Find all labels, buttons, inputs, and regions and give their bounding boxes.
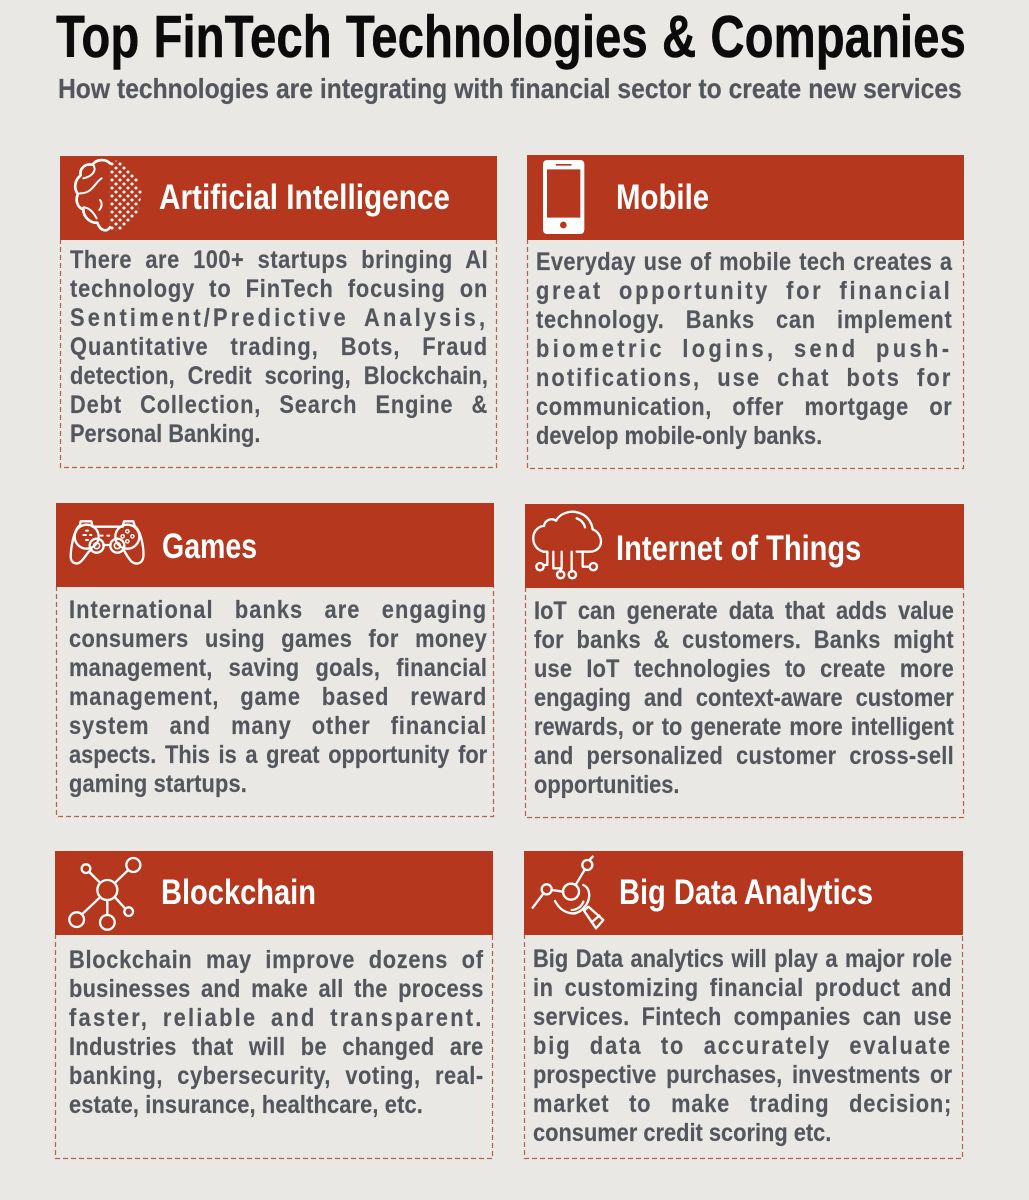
body text: aspects. This is a great opportunity for [69, 741, 487, 769]
body text: Quantitative trading, Bots, Fraud [70, 333, 488, 361]
body text: engaging and context-aware customer [534, 684, 954, 712]
heading: Artificial Intelligence [159, 178, 450, 217]
body text: in customizing financial product and [533, 974, 952, 1002]
panel: big data analytics [524, 851, 964, 1160]
icon: brain [74, 158, 142, 232]
panel: mobile [526, 155, 964, 470]
panel header [55, 851, 493, 935]
body text: estate, insurance, healthcare, etc. [69, 1091, 423, 1119]
body text: rewards, or to generate more intelligent [534, 713, 954, 741]
body text: services. Fintech companies can use [533, 1003, 952, 1031]
body text: gaming startups. [69, 770, 247, 798]
panel header [527, 155, 964, 240]
body text: biometric logins, send push- [536, 335, 952, 363]
body text: prospective purchases, investments or [533, 1061, 952, 1089]
icon: game controller [70, 520, 145, 565]
body text [536, 248, 952, 450]
panel body outline [54, 934, 494, 1160]
body text: There are 100+ startups bringing AI [70, 246, 488, 274]
body text: International banks are engaging [69, 596, 487, 624]
panel: blockchain [54, 851, 494, 1160]
body text: Big Data analytics will play a major role [533, 945, 952, 973]
body text: IoT can generate data that adds value [534, 597, 954, 625]
panel body outline [56, 586, 494, 818]
body text: opportunities. [534, 771, 679, 799]
body text [69, 946, 484, 1119]
body text: notifications, use chat bots for [536, 364, 952, 392]
icon: cloud network [532, 510, 602, 580]
body text [534, 597, 954, 799]
body text: banking, cybersecurity, voting, real- [69, 1062, 484, 1090]
body text: management, saving goals, financial [69, 654, 487, 682]
icon: magnifier with data points [531, 855, 604, 930]
heading: Big Data Analytics [619, 873, 873, 912]
icon: network nodes [68, 856, 142, 931]
body text: businesses and make all the process [69, 975, 484, 1003]
panel body outline [60, 239, 498, 468]
body text: communication, offer mortgage or [536, 393, 952, 421]
title: Top FinTech Technologies & Companies [56, 4, 966, 70]
panel: games [56, 503, 494, 818]
body text [70, 246, 488, 448]
panel: artificial intelligence [60, 156, 498, 468]
body text: system and many other financial [69, 712, 487, 740]
panel: internet of things [524, 504, 964, 818]
body text: technology. Banks can implement [536, 306, 952, 334]
body text: market to make trading decision; [533, 1090, 952, 1118]
heading: Blockchain [161, 873, 316, 912]
heading: Games [162, 527, 257, 566]
heading: Internet of Things [616, 529, 861, 568]
body text: use IoT technologies to create more [534, 655, 954, 683]
panel header [524, 851, 963, 935]
body text [69, 596, 487, 798]
body text: great opportunity for financial [536, 277, 952, 305]
panel body outline [524, 934, 964, 1160]
panel header [525, 504, 964, 588]
subtitle: How technologies are integrating with financial sector to create new services [58, 73, 962, 104]
body text: develop mobile-only banks. [536, 422, 822, 450]
body text: big data to accurately evaluate [533, 1032, 952, 1060]
body text: consumers using games for money [69, 625, 487, 653]
body text: Industries that will be changed are [69, 1033, 484, 1061]
body text: for banks & customers. Banks might [534, 626, 954, 654]
body text: management, game based reward [69, 683, 487, 711]
body text: and personalized customer cross-sell [534, 742, 954, 770]
panel header [60, 156, 497, 240]
body text: Debt Collection, Search Engine & [70, 391, 488, 419]
body text: Everyday use of mobile tech creates a [536, 248, 952, 276]
panel body outline [524, 587, 964, 818]
icon: smartphone [543, 160, 584, 234]
body text: Sentiment/Predictive Analysis, [70, 304, 488, 332]
body text: faster, reliable and transparent. [69, 1004, 484, 1032]
body text [533, 945, 952, 1147]
body text: Personal Banking. [70, 420, 260, 448]
panel header [56, 503, 494, 587]
body text: Blockchain may improve dozens of [69, 946, 484, 974]
heading: Mobile [616, 178, 709, 217]
body text: consumer credit scoring etc. [533, 1119, 831, 1147]
panel body outline [526, 239, 964, 470]
body text: technology to FinTech focusing on [70, 275, 488, 303]
body text: detection, Credit scoring, Blockchain, [70, 362, 488, 390]
